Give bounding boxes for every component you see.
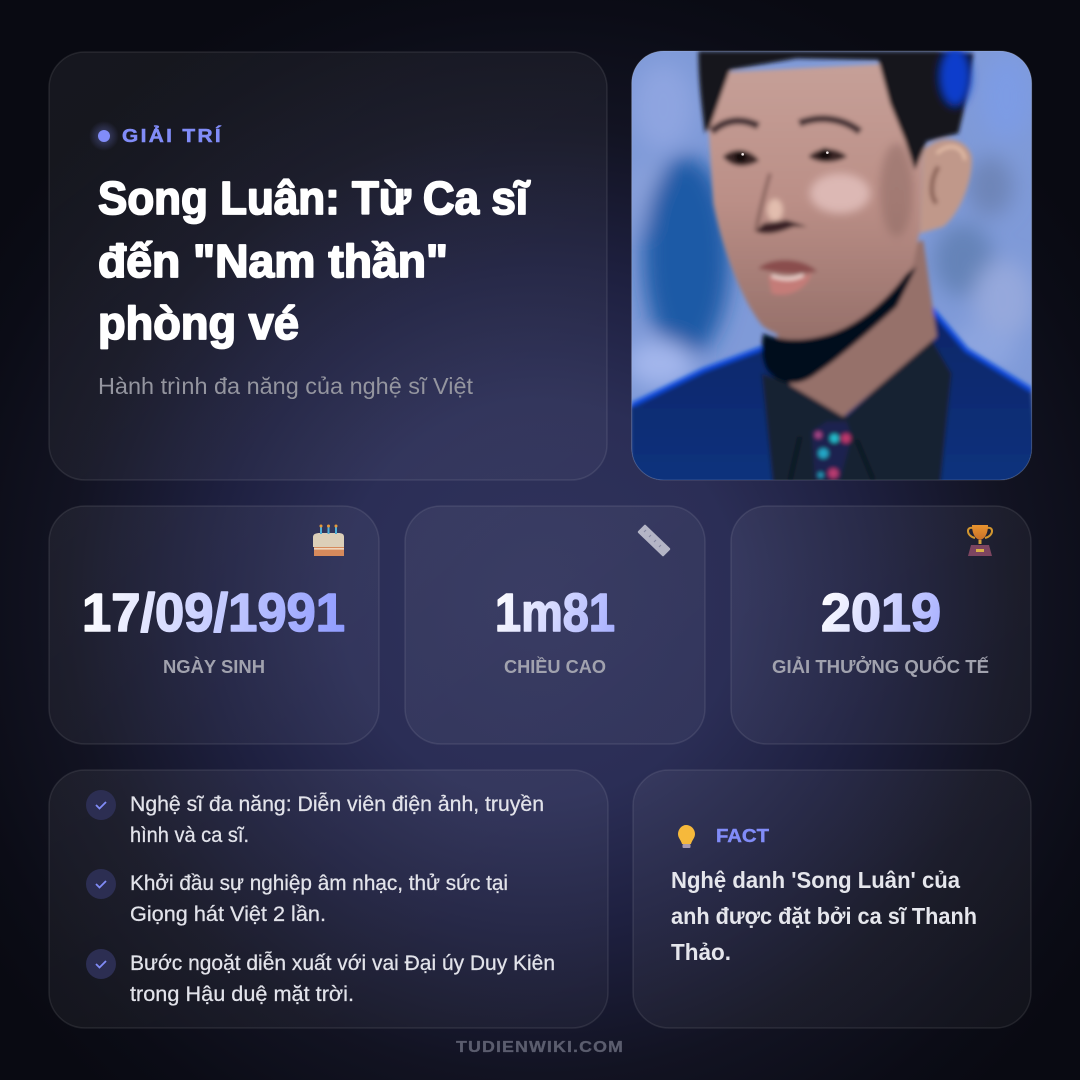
list item 3: trong Hậu duệ mặt trời. bbox=[130, 983, 354, 1006]
list item 2 bbox=[86, 869, 508, 926]
panel: portrait photo bbox=[627, 40, 1040, 490]
title bbox=[98, 172, 531, 349]
face bbox=[705, 63, 923, 338]
fact text: Thảo. bbox=[671, 939, 731, 965]
category tag bbox=[89, 121, 223, 151]
value: 17/09/1991 bbox=[82, 583, 345, 643]
neck bbox=[770, 240, 937, 417]
value: 1m81 bbox=[495, 583, 615, 643]
fact heading: FACT bbox=[716, 826, 769, 846]
shirt bbox=[762, 337, 952, 490]
nose bbox=[756, 173, 770, 232]
panel: award stat bbox=[731, 506, 1031, 744]
icon: birthday cake bbox=[313, 524, 344, 556]
panel: birth date stat bbox=[49, 506, 379, 744]
value: 2019 bbox=[821, 583, 941, 643]
mouth bbox=[758, 260, 817, 273]
list item 1: Nghệ sĩ đa năng: Diễn viên điện ảnh, truyền bbox=[130, 793, 544, 816]
ear bbox=[920, 139, 972, 233]
panel: height stat bbox=[405, 506, 705, 744]
list item 1: hình và ca sĩ. bbox=[130, 824, 249, 847]
neck shadow bbox=[762, 267, 917, 383]
eyebrows bbox=[712, 121, 758, 132]
cheek highlight bbox=[810, 173, 870, 213]
label: NGÀY SINH bbox=[163, 656, 265, 677]
fact text: Nghệ danh 'Song Luân' của bbox=[671, 867, 960, 893]
panel: fact card bbox=[633, 770, 1031, 1028]
panel: hero title card bbox=[49, 52, 607, 480]
list item 3: Bước ngoặt diễn xuất với vai Đại úy Duy Kiên bbox=[130, 952, 555, 975]
jacket bbox=[632, 312, 1032, 480]
label: GIẢI THƯỞNG QUỐC TẾ bbox=[772, 656, 989, 677]
eyes bbox=[723, 150, 759, 166]
subtitle: Hành trình đa năng của nghệ sĩ Việt bbox=[98, 373, 474, 399]
list item 3 bbox=[86, 949, 555, 1006]
list item 2: Khởi đầu sự nghiệp âm nhạc, thử sức tại bbox=[130, 872, 508, 895]
fact text bbox=[671, 867, 977, 965]
title: Song Luân: Từ Ca sĩ bbox=[98, 172, 531, 224]
label: CHIỀU CAO bbox=[504, 656, 606, 677]
title: phòng vé bbox=[98, 297, 299, 349]
title: đến "Nam thần" bbox=[98, 235, 448, 287]
fact text: anh được đặt bởi ca sĩ Thanh bbox=[671, 903, 977, 929]
icon: ruler bbox=[639, 526, 669, 555]
list item 1 bbox=[86, 790, 544, 847]
icon: trophy bbox=[968, 525, 992, 556]
footer website credit: TUDIENWIKI.COM bbox=[456, 1039, 624, 1056]
list item 2: Giọng hát Việt 2 lần. bbox=[130, 903, 326, 926]
icon: light bulb bbox=[678, 825, 695, 848]
category tag: GIẢI TRÍ bbox=[122, 125, 223, 146]
hair bbox=[698, 51, 973, 170]
panel: key points list bbox=[49, 770, 608, 1028]
tie bbox=[812, 422, 852, 480]
